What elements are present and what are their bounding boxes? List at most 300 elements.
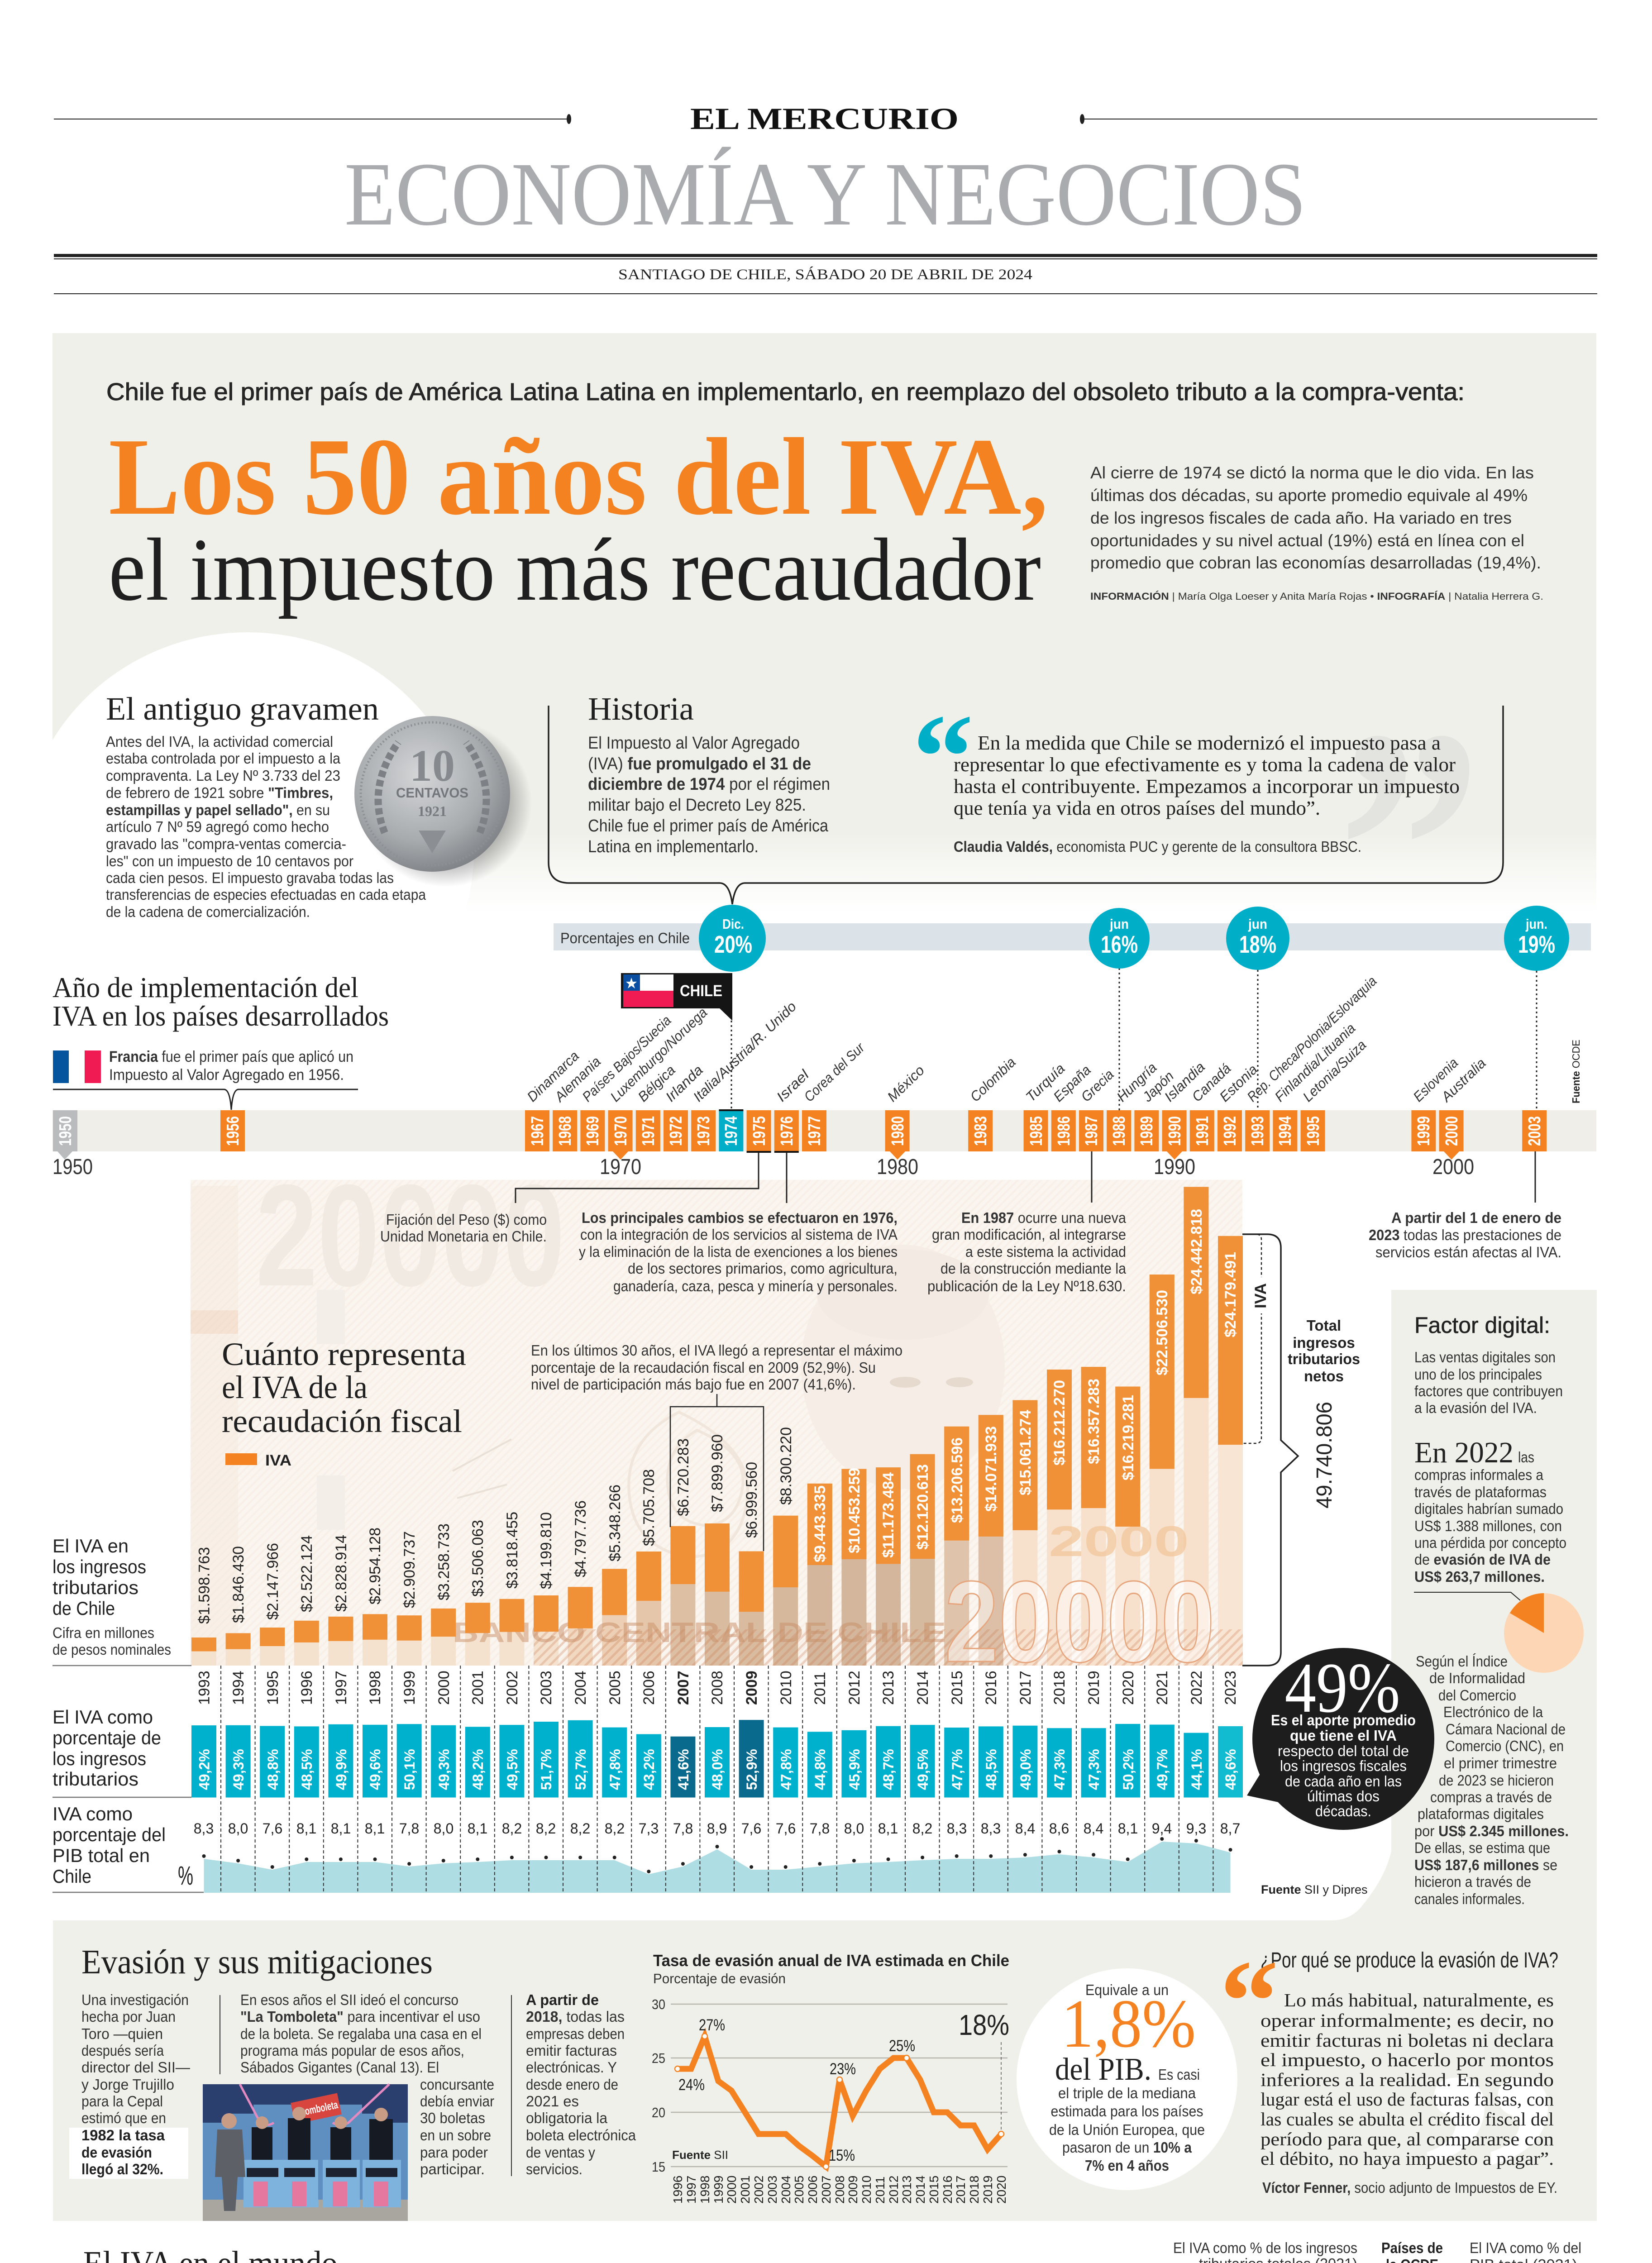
decade axis labels: 1950	[53, 1155, 93, 1179]
decade axis labels: 1990	[1154, 1155, 1195, 1179]
column 2: 30 boletas	[420, 2110, 485, 2126]
percent labels: 48,0%	[709, 1749, 726, 1790]
panel: main header background	[21, 333, 1596, 1069]
value labels above bars: $3.258.733	[435, 1523, 453, 1600]
photo: La Tomboleta show: la tomboleta	[293, 2099, 339, 2120]
year labels: 1975	[750, 1116, 769, 1146]
values: 8,2	[605, 1820, 625, 1837]
icon: coin: CENTAVOS	[396, 785, 468, 801]
percent labels: 49,3%	[230, 1749, 247, 1790]
country labels: Australia	[1437, 1055, 1489, 1105]
chart: IVA en los ingresos tributarios	[191, 1187, 1360, 1686]
country labels: Letonia/Suiza	[1300, 1037, 1369, 1105]
chart: IVA como porcentaje del PIB	[194, 1666, 1240, 1893]
year axis: 2010	[778, 1671, 795, 1705]
column 2: participar.	[420, 2161, 485, 2177]
percent labels: 47,8%	[778, 1749, 794, 1790]
chart: IVA como porcentaje de ingresos	[191, 1720, 1243, 1798]
year axis: 2011	[812, 1672, 829, 1705]
value labels inside bars: $9.443.335	[812, 1485, 829, 1562]
values: 8,0	[844, 1820, 864, 1837]
note: peso	[380, 1211, 547, 1245]
values: 8,2	[570, 1820, 590, 1837]
year labels: 1999	[711, 2176, 726, 2204]
total value: 49.740.806	[1313, 1402, 1337, 1509]
values: 8,2	[912, 1820, 932, 1837]
heading: Historia	[588, 691, 694, 727]
IVA bracket	[1242, 1234, 1270, 1443]
value labels inside bars: $11.173.484	[880, 1472, 897, 1558]
center header: Países de	[1381, 2239, 1443, 2256]
percent labels: 48,8%	[265, 1749, 281, 1790]
values: 7,6	[776, 1820, 796, 1837]
text block	[1414, 1349, 1563, 1416]
legend: IVA	[265, 1452, 291, 1469]
year labels: 1974	[722, 1116, 741, 1146]
year axis: 2013	[880, 1671, 897, 1705]
chart: tasa de evasion	[652, 1951, 1009, 2204]
quote: emitir facturas ni boletas ni declara	[1260, 2030, 1554, 2051]
axis labels: 30	[652, 1996, 665, 2012]
kicker: Chile fue el primer país de América Latina Latina en implementarlo, en reemplazo del obsoleto tributo a la compra-venta:	[106, 378, 1465, 406]
value labels above bars: $2.147.966	[264, 1543, 282, 1620]
text block: diciembre de 1974 por el régimen	[588, 775, 830, 794]
value labels inside bars: $12.120.613	[914, 1464, 931, 1550]
year axis: 2016	[983, 1671, 1000, 1705]
note: 30 years: En los últimos 30 años, el IVA llegó a representar el máximo	[531, 1342, 902, 1359]
values: 8,0	[228, 1820, 248, 1837]
year boxes	[53, 1109, 1547, 1153]
callout: 1,8 percent: el triple de la mediana	[1058, 2085, 1196, 2101]
percent labels: 49,5%	[504, 1749, 520, 1790]
values	[194, 1820, 1240, 1837]
highlight box	[69, 2128, 188, 2179]
values: 7,8	[810, 1820, 830, 1837]
pie chart	[1414, 1592, 1584, 1673]
callout: 49 percent bubble: 49%	[1284, 1648, 1400, 1728]
text block: (IVA) fue promulgado el 31 de	[588, 754, 811, 773]
decade axis labels: 1980	[877, 1155, 918, 1179]
total label: Total	[1307, 1317, 1341, 1334]
heading: cuánto representa: Cuánto representa	[222, 1336, 466, 1372]
callout: 1,8 percent: Es casi	[1158, 2066, 1200, 2083]
values: 8,0	[434, 1820, 454, 1837]
column 3: obligatoria la	[526, 2110, 608, 2126]
separators	[221, 1666, 1213, 1893]
column 2: en un sobre	[420, 2127, 491, 2144]
text block: artículo 7 Nº 59 agregó como hecho	[106, 818, 329, 835]
year labels: 2003	[1525, 1116, 1544, 1146]
percent labels: 47,7%	[949, 1749, 965, 1790]
values: 8,1	[296, 1820, 316, 1837]
label: porcentaje PIB: IVA como	[53, 1803, 133, 1824]
country labels: Alemania	[551, 1054, 604, 1105]
column 2: En esos años el SII ideó el concurso	[240, 1991, 458, 2008]
label: porcentaje ingresos: los ingresos	[53, 1748, 146, 1769]
value labels inside bars: $24.442.818	[1188, 1209, 1205, 1294]
intro paragraph	[1090, 463, 1543, 602]
icon: 16 percent	[1089, 908, 1150, 969]
icon: 19 percent: jun.	[1525, 916, 1547, 932]
center header	[1381, 2239, 1443, 2263]
decade axis labels	[53, 1155, 1474, 1179]
intro paragraph: de los ingresos fiscales de cada año. Ha variado en tres	[1090, 509, 1512, 527]
text block: gravado las "compra-ventas comercia-	[106, 835, 346, 852]
value labels inside bars: $16.212.270	[1051, 1380, 1068, 1466]
percent labels: 44,8%	[812, 1749, 828, 1790]
values: 8,3	[981, 1820, 1001, 1837]
country labels: Eslovenia	[1410, 1055, 1461, 1105]
column 3: empresas deben	[526, 2025, 625, 2042]
axis labels: 20	[652, 2105, 665, 2120]
column 1: después sería	[81, 2042, 164, 2059]
axis labels	[652, 1996, 665, 2175]
note: 1976: ganadería, caza, pesca y minería y personales.	[613, 1278, 898, 1294]
quote: Lo más habitual, naturalmente, es	[1284, 1990, 1554, 2010]
text block	[1414, 1466, 1566, 1585]
percent labels: 48,2%	[470, 1749, 486, 1790]
intro paragraph: oportunidades y su nivel actual (19%) está en línea con el	[1090, 531, 1524, 550]
year axis: 2009	[743, 1671, 760, 1705]
year axis: 2018	[1051, 1671, 1068, 1705]
country labels: Corea del Sur	[801, 1039, 868, 1105]
country labels: España	[1050, 1062, 1094, 1105]
country labels: Irlanda	[663, 1062, 706, 1105]
country labels: Japón	[1139, 1068, 1177, 1105]
values: 8,1	[365, 1820, 385, 1837]
column 1	[81, 1991, 190, 2177]
quote: representar lo que efectivamente es y toma la cadena de valor	[954, 754, 1456, 776]
attribution: Víctor Fenner, socio adjunto de Impuestos de EY.	[1262, 2179, 1557, 2196]
icon: 19 percent	[1504, 906, 1569, 971]
note: 1976: y la eliminación de la lista de exenciones a los bienes	[579, 1243, 898, 1260]
icon: 18 percent: 18%	[1239, 931, 1276, 958]
label: ingresos tributarios: Cifra en millones	[53, 1624, 154, 1641]
value labels above bars: $7.899.960	[709, 1434, 726, 1512]
non IVA revenue bars	[191, 1187, 1243, 1666]
year labels: 2018	[967, 2176, 981, 2204]
markers	[675, 2034, 1004, 2169]
year axis: 2022	[1188, 1671, 1205, 1705]
year axis: 2004	[572, 1671, 589, 1705]
percent labels: 50,2%	[1120, 1749, 1136, 1790]
year labels: 2013	[900, 2176, 914, 2204]
values: 8,6	[1049, 1820, 1069, 1837]
year axis: 2023	[1222, 1671, 1239, 1705]
year axis: 1994	[230, 1671, 247, 1705]
intro paragraph: Al cierre de 1974 se dictó la norma que le dio vida. En las	[1090, 463, 1534, 482]
value labels: 25%	[889, 2037, 915, 2055]
panel: evasion background	[53, 1290, 1597, 2221]
bracket 2007-2009	[670, 1394, 764, 1551]
year axis: 2007	[675, 1671, 692, 1705]
quote: las cuales se abulta el crédito fiscal del	[1260, 2109, 1554, 2129]
year labels: 1985	[1027, 1116, 1046, 1146]
callout: 1,8 percent: 1,8%	[1061, 1986, 1196, 2062]
year labels: 2009	[846, 2176, 860, 2204]
quote	[954, 732, 1460, 819]
percent labels: 48,5%	[299, 1749, 315, 1790]
value labels inside bars: $16.357.283	[1085, 1379, 1103, 1464]
note: 1987: gran modificación, al integrarse	[932, 1226, 1126, 1243]
callout: 1,8 percent: del PIB.	[1055, 2052, 1151, 2087]
year labels: 1969	[583, 1116, 602, 1146]
newspaper name: EL MERCURIO	[690, 101, 959, 136]
area	[204, 1842, 1230, 1893]
text block: cada cien pesos. El impuesto gravaba todas las	[106, 869, 394, 886]
year axis: 1999	[401, 1671, 418, 1705]
country labels: México	[884, 1062, 927, 1105]
year axis: 2021	[1154, 1671, 1171, 1705]
year labels: 1991	[1193, 1116, 1212, 1146]
callout: 1,8 percent: estimada para los países	[1051, 2103, 1203, 2120]
year labels: 2005	[792, 2176, 806, 2204]
country labels: Israel	[773, 1066, 812, 1105]
icon: 20 percent	[699, 905, 766, 972]
left header: El IVA como % de los ingresos	[1173, 2239, 1357, 2256]
panel: banknote background	[191, 1154, 1242, 1666]
year axis: 1996	[298, 1671, 315, 1705]
text block: través de plataformas	[1414, 1484, 1547, 1500]
label: ingresos tributarios: los ingresos	[53, 1556, 146, 1577]
year labels: 2003	[765, 2176, 779, 2204]
column 3: A partir de	[526, 1991, 599, 2008]
note: 2023: A partir del 1 de enero de	[1391, 1209, 1561, 1226]
country labels: Turquía	[1023, 1060, 1068, 1105]
value labels above bars: $3.818.455	[504, 1512, 521, 1589]
text block: Comercio (CNC), en	[1446, 1738, 1564, 1754]
photo: La Tomboleta show	[203, 2084, 408, 2221]
column 2: "La Tomboleta" para incentivar el uso	[240, 2008, 480, 2025]
year labels: 1999	[1414, 1116, 1433, 1146]
icon: 20 percent: 20%	[714, 931, 752, 958]
column 2: programa más popular de esos años,	[240, 2042, 464, 2059]
heading: cuánto representa: recaudación fiscal	[222, 1403, 462, 1439]
note: 2023	[1369, 1209, 1561, 1260]
value labels inside bars: $24.179.491	[1222, 1252, 1239, 1337]
note: peso: Unidad Monetaria en Chile.	[380, 1228, 547, 1245]
label: ingresos tributarios: El IVA en	[53, 1535, 129, 1556]
percent labels	[196, 1749, 1239, 1790]
text block: Latina en implementarlo.	[588, 837, 759, 856]
note: 1976: de los sectores primarios, como agricultura,	[628, 1260, 898, 1277]
heading: IVA en los países desarrollados	[53, 1000, 389, 1032]
country labels: Estonia	[1217, 1061, 1260, 1105]
total label: ingresos	[1293, 1334, 1355, 1351]
percent labels: 51,7%	[538, 1749, 554, 1790]
text block: les" con un impuesto de 10 centavos por	[106, 853, 353, 869]
note: 2023: 2023 todas las prestaciones de	[1369, 1227, 1561, 1243]
column 3: emitir facturas	[526, 2042, 617, 2059]
value labels: 24%	[678, 2076, 705, 2094]
country labels: Islandia	[1161, 1059, 1208, 1105]
value labels inside bars: $14.071.933	[983, 1426, 1000, 1512]
text block: compras a través de	[1430, 1789, 1552, 1805]
value labels: 23%	[830, 2060, 856, 2078]
quote: lugar está el uso de facturas falsas, con	[1260, 2089, 1554, 2110]
text block: el primer trimestre	[1444, 1755, 1557, 1771]
quote: el débito, no haya impuesto a pagar”.	[1260, 2148, 1554, 2169]
chart title: Tasa de evasión anual de IVA estimada en Chile	[653, 1951, 1009, 1970]
callout: 49 percent bubble: respecto del total de	[1278, 1743, 1409, 1759]
text block: US$ 187,6 millones se	[1414, 1857, 1557, 1873]
right header: El IVA como % del	[1470, 2239, 1581, 2256]
percent labels: 49,3%	[436, 1749, 452, 1790]
value labels above bars: $2.909.737	[401, 1531, 418, 1608]
callout bracket	[549, 706, 1503, 904]
text block: canales informales.	[1414, 1891, 1525, 1907]
year labels: 2020	[994, 2176, 1008, 2204]
text block: Electrónico de la	[1443, 1704, 1543, 1720]
column 2: para poder	[420, 2144, 488, 2161]
year labels: 1994	[1276, 1116, 1295, 1146]
quote: hasta el contribuyente. Empezamos a incorporar un impuesto	[954, 775, 1460, 797]
note: peso: Fijación del Peso ($) como	[386, 1211, 547, 1228]
values: 8,1	[878, 1820, 898, 1837]
label: ingresos tributarios: de pesos nominales	[53, 1641, 171, 1658]
column 3: de ventas y	[526, 2144, 595, 2161]
year labels: 2016	[941, 2176, 955, 2204]
quote: inferiores a la realidad. En segundo	[1260, 2069, 1554, 2090]
country labels: Bélgica	[635, 1062, 678, 1105]
year axis: 1998	[367, 1671, 384, 1705]
label: porcentaje ingresos: porcentaje de	[53, 1727, 161, 1748]
values: 7,3	[639, 1820, 659, 1837]
year labels: 2019	[981, 2176, 995, 2204]
value labels above bars: $5.705.708	[640, 1469, 658, 1546]
percent labels: 48,6%	[1222, 1749, 1239, 1790]
text block: compraventa. La Ley Nº 3.733 del 23	[106, 767, 340, 784]
values: 8,7	[1220, 1820, 1240, 1837]
text block: Según el Índice	[1416, 1653, 1508, 1670]
year labels	[56, 1116, 1544, 1146]
column 3: electrónicas. Y	[526, 2059, 617, 2076]
value labels above bars: $2.954.128	[367, 1528, 384, 1604]
dotted connectors	[731, 968, 1537, 1110]
column 1: y Jorge Trujillo	[81, 2076, 174, 2093]
year labels: 1956	[224, 1116, 243, 1146]
callout: 49 percent bubble: Es el aporte promedio	[1271, 1712, 1416, 1728]
note: 1987	[927, 1209, 1127, 1294]
year labels: 1973	[694, 1116, 713, 1146]
column 2: de la boleta. Se regalaba una casa en el	[240, 2025, 482, 2042]
year labels: 2008	[833, 2176, 847, 2204]
note: 1987: En 1987 ocurre una nueva	[961, 1209, 1127, 1226]
percent labels: 49,6%	[367, 1749, 383, 1790]
note: 30 years: porcentaje de la recaudación fiscal en 2009 (52,9%). Su	[531, 1359, 876, 1376]
quote: que tenía ya vida en otros países del mundo”.	[954, 797, 1320, 819]
percent labels: 43,2%	[641, 1749, 657, 1790]
note: 1987: de la construcción mediante la	[941, 1260, 1127, 1277]
text block: Francia fue el primer país que aplicó un	[109, 1048, 377, 1065]
year axis: 2019	[1085, 1671, 1103, 1705]
year axis: 2000	[435, 1671, 453, 1705]
percent labels: 44,1%	[1189, 1749, 1205, 1790]
text block: de 2023 se hicieron	[1439, 1772, 1554, 1789]
percent labels: 48,7%	[880, 1749, 897, 1790]
quote	[1260, 1990, 1554, 2169]
label: porcentaje PIB: %	[178, 1861, 193, 1891]
icon: 20 percent: Dic.	[722, 916, 744, 932]
panel: year of implementation heading	[53, 971, 389, 1110]
year axis: 1997	[333, 1671, 350, 1705]
date line: SANTIAGO DE CHILE, SÁBADO 20 DE ABRIL DE 2024	[618, 266, 1032, 283]
text block: de la cadena de comercialización.	[106, 903, 310, 920]
year labels: 1950	[56, 1116, 75, 1146]
text block: uno de los principales	[1414, 1366, 1542, 1383]
total brace	[1242, 1234, 1298, 1666]
headline block	[106, 378, 1465, 619]
value labels inside bars: $13.206.596	[949, 1437, 966, 1523]
source: Fuente SII	[672, 2148, 728, 2162]
percent labels: 52,9%	[744, 1749, 760, 1790]
text block: Antes del IVA, la actividad comercial	[106, 733, 333, 750]
year axis: 2012	[846, 1671, 863, 1705]
text block: Impuesto al Valor Agregado en 1956.	[109, 1066, 344, 1084]
year labels: 1972	[667, 1116, 686, 1146]
banknote overlay: 20000	[945, 1557, 1215, 1686]
year axis: 2017	[1017, 1671, 1034, 1705]
year labels: 1992	[1221, 1116, 1240, 1146]
text block: digitales habrían sumado	[1414, 1500, 1563, 1517]
country labels: Luxemburgo/Noruega	[607, 1004, 710, 1105]
column 3: 2018, todas las	[526, 2008, 625, 2025]
year labels: 2000	[725, 2176, 739, 2204]
label: porcentaje ingresos: tributarios	[53, 1768, 138, 1790]
values: 8,1	[1118, 1820, 1138, 1837]
column 1: de evasión	[81, 2144, 152, 2161]
country labels: Canadá	[1189, 1060, 1234, 1105]
label: ingresos tributarios: de Chile	[53, 1598, 115, 1619]
year axis: 2014	[914, 1671, 931, 1705]
decade pointers	[57, 1151, 1459, 1160]
value labels above bars: $6.720.283	[675, 1438, 692, 1516]
year axis	[196, 1671, 1239, 1705]
column 3: boleta electrónica	[526, 2127, 636, 2144]
text block: Chile fue el primer país de América	[588, 816, 829, 835]
text block: de Informalidad	[1429, 1670, 1525, 1686]
year labels: 1970	[611, 1116, 630, 1146]
panel: historia	[549, 659, 1503, 1037]
values: 8,3	[194, 1820, 214, 1837]
stat headline: En 2022	[1414, 1436, 1514, 1469]
year axis: 1995	[264, 1671, 282, 1705]
values: 8,3	[947, 1820, 967, 1837]
text block: a la evasión del IVA.	[1414, 1399, 1537, 1416]
callout: 49 percent bubble: que tiene el IVA	[1290, 1727, 1397, 1744]
year labels: 2004	[779, 2176, 793, 2204]
chart subtitle: Porcentaje de evasión	[653, 1971, 786, 1986]
total label: netos	[1304, 1368, 1344, 1385]
last value: 18%	[959, 2009, 1009, 2041]
values: 8,4	[1084, 1820, 1103, 1837]
column 1: para la Cepal	[81, 2093, 163, 2110]
heading: Año de implementación del	[53, 971, 358, 1003]
percent labels: 49,5%	[915, 1749, 931, 1790]
year labels: 2010	[859, 2176, 874, 2204]
values: 7,6	[263, 1820, 282, 1837]
value labels above bars	[196, 1427, 795, 1624]
values: 7,8	[673, 1820, 693, 1837]
icon: 19 percent: 19%	[1518, 931, 1555, 958]
icon: 16 percent: 16%	[1101, 931, 1138, 958]
text block: El Impuesto al Valor Agregado	[588, 734, 800, 753]
percent labels: 52,7%	[573, 1749, 589, 1790]
percent labels: 47,3%	[1051, 1749, 1068, 1790]
callout: 49 percent bubble: últimas dos	[1307, 1788, 1380, 1805]
value labels above bars: $8.300.220	[778, 1427, 795, 1505]
value labels above bars: $2.522.124	[298, 1535, 315, 1612]
